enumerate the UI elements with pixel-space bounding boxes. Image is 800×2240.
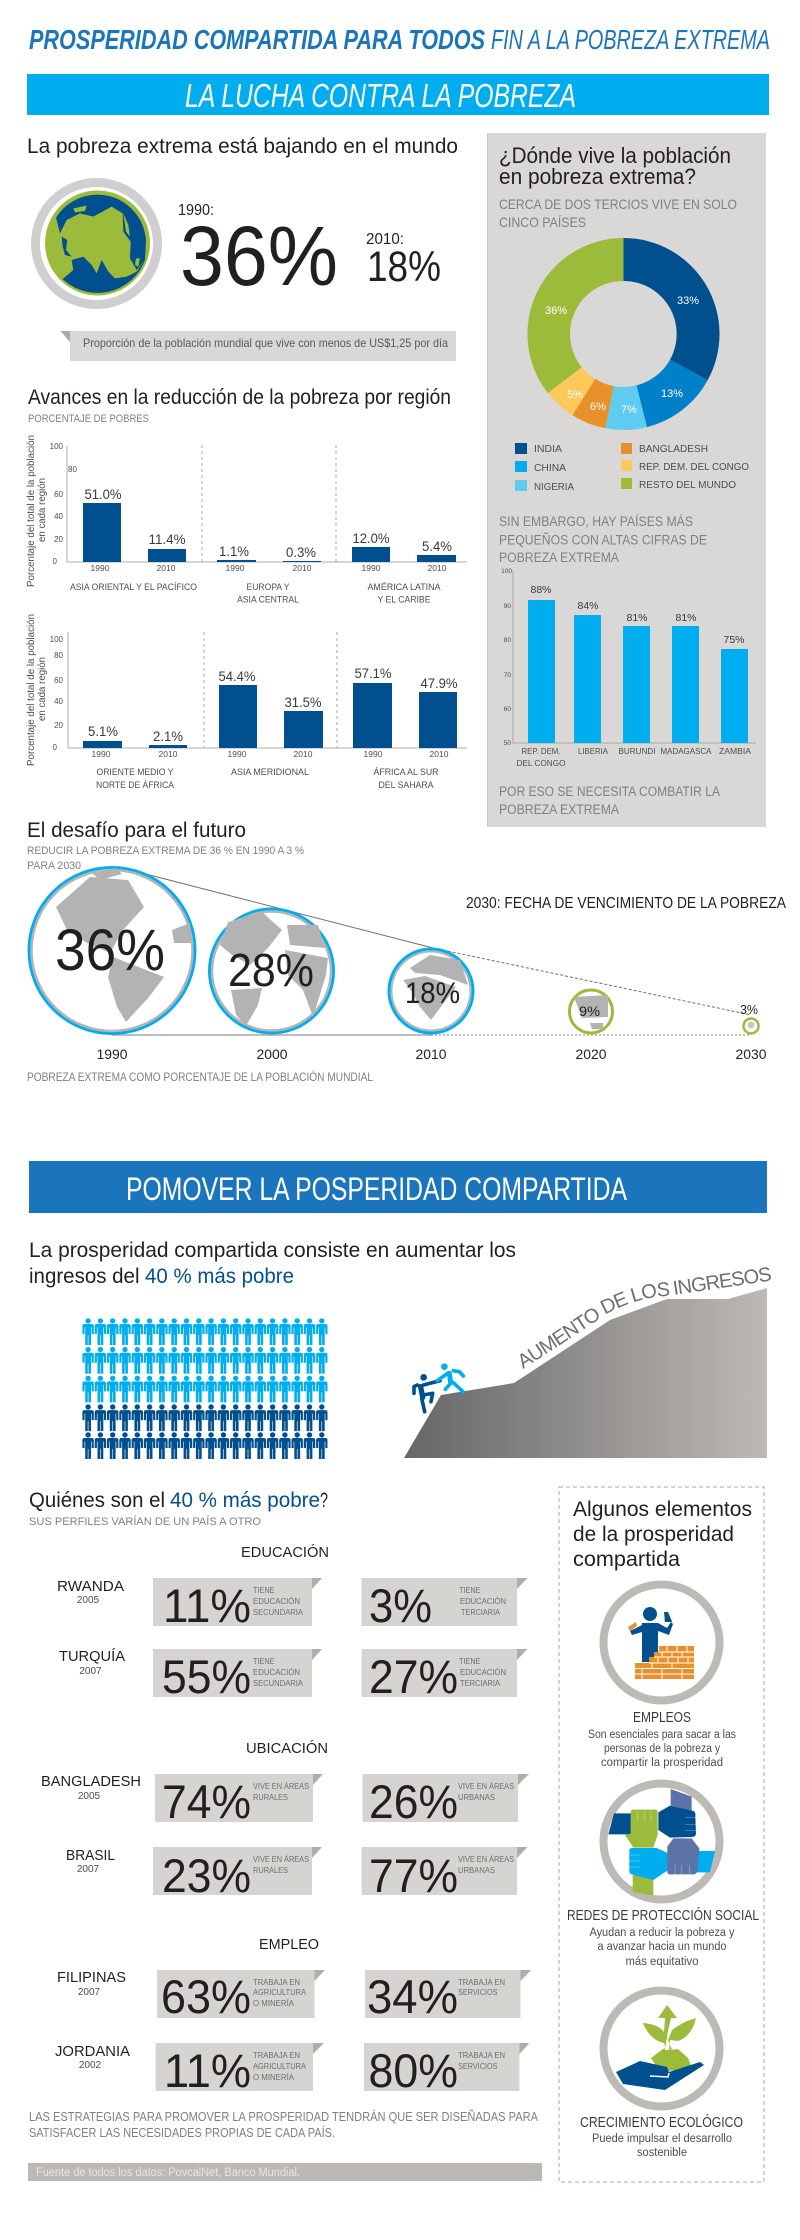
bar chart: regiones superior: 20 — [54, 535, 64, 544]
row: Rwanda: EDUCACIÓN — [253, 1597, 300, 1606]
panel: dónde vive la población — [487, 133, 766, 827]
row: Rwanda: RWANDA — [57, 1578, 124, 1595]
heading: prosperidad compartida: La prosperidad compartida consiste en aumentar los — [29, 1239, 516, 1262]
text block: estrategias — [29, 2109, 539, 2140]
heading: prosperidad compartida: 40 % más pobre — [145, 1265, 294, 1288]
subheading: países más pequeños: PEQUEÑOS CON ALTAS CIFRAS DE — [499, 532, 707, 548]
row: Filipinas: 63% — [161, 1970, 251, 2023]
globe 2010: 18% — [405, 977, 460, 1010]
year labels: 2030 — [736, 1046, 767, 1062]
row: Jordania: TRABAJA EN — [253, 2051, 300, 2060]
row: Rwanda: TIENE — [253, 1586, 274, 1595]
donut chart: 7% — [621, 404, 637, 416]
bar chart: regiones inferior: 20 — [54, 721, 64, 730]
heading: quiénes son — [29, 1489, 328, 1528]
heading: quiénes son: 40 % más pobre — [170, 1489, 320, 1512]
text block: estrategias: SATISFACER LAS NECESIDADES PROPIAS DE CADA PAÍS. — [29, 2125, 335, 2140]
row: Bangladesh: VIVE EN ÁREAS — [253, 1782, 309, 1791]
bar chart: regiones superior: 0.3% — [286, 544, 316, 560]
bar chart: regiones inferior: 1990 — [92, 749, 111, 759]
banner: la lucha contra la pobreza — [27, 74, 769, 115]
section: empleo: EMPLEO — [259, 1936, 319, 1953]
bar chart: regiones superior: Porcentaje del total de la población — [25, 435, 37, 587]
bar chart: regiones superior: 80 — [68, 465, 77, 474]
row: Turquía: TIENE — [253, 1657, 274, 1666]
row: Jordania: AGRICULTURA — [253, 2062, 307, 2071]
year labels: 2000 — [256, 1046, 288, 1062]
bar chart: países: 75% — [723, 634, 745, 646]
bar chart: regiones superior: 60 — [54, 490, 64, 499]
bar chart: regiones superior: 100 — [50, 442, 64, 451]
bar chart: países: ZAMBIA — [719, 746, 751, 756]
source bar: Fuente de todos los datos: PovcalNet, Banco Mundial. — [36, 2167, 300, 2179]
bar chart: regiones superior: 1990 — [226, 563, 245, 573]
bar chart: regiones inferior: 57.1% — [354, 665, 392, 681]
bar chart: regiones inferior: 2010 — [159, 749, 178, 759]
donut chart: 36% — [545, 305, 567, 317]
panel heading: CINCO PAÍSES — [499, 214, 586, 230]
heading: avances por región: PORCENTAJE DE POBRES — [28, 413, 149, 425]
row: Turquía: EDUCACIÓN — [460, 1668, 506, 1677]
bar chart: regiones superior: 12.0% — [352, 530, 390, 546]
bar chart: regiones superior: 40 — [54, 512, 64, 521]
bar chart: regiones inferior: 0 — [53, 743, 58, 752]
icon: climbers — [414, 1363, 463, 1412]
banner: promover la prosperidad — [29, 1161, 767, 1213]
bar chart: países: MADAGASCA — [660, 746, 712, 756]
row: Turquía: SECUNDARIA — [253, 1679, 304, 1688]
row: Jordania: SERVICIOS — [458, 2062, 498, 2071]
panel heading: ¿Dónde vive la población — [499, 143, 731, 168]
globe 2020 — [570, 990, 612, 1033]
text: empleos — [588, 1709, 736, 1769]
row: Brasil: 2007 — [77, 1864, 100, 1875]
bar chart: regiones inferior: 60 — [54, 676, 64, 685]
subheading: países más pequeños — [499, 514, 707, 565]
source bar — [28, 2163, 542, 2181]
heading: prosperidad compartida — [29, 1239, 516, 1288]
bar chart: regiones superior: 2010 — [293, 563, 312, 573]
heading: el desafío para el futuro — [27, 819, 304, 872]
text block: estrategias: LAS ESTRATEGIAS PARA PROMOVER LA PROSPERIDAD TENDRÁN QUE SER DISEÑADAS PARA — [29, 2109, 539, 2124]
bar chart: países: 84% — [577, 600, 599, 612]
bar chart: países: 70 — [504, 672, 511, 679]
globe 1990: 36% — [55, 918, 165, 983]
illustration: income mountain — [404, 1267, 771, 1458]
row: Jordania: 11% — [164, 2044, 251, 2097]
globe 2030 — [740, 1002, 758, 1034]
row: Bangladesh: 2005 — [78, 1791, 101, 1802]
bar chart: regiones superior: 0 — [53, 557, 58, 566]
bar chart: regiones inferior: Porcentaje del total de la población — [25, 614, 37, 766]
callout: proporción — [60, 331, 456, 361]
globe 2000: 28% — [228, 944, 314, 996]
heading: avances por región: Avances en la reducción de la pobreza por región — [28, 386, 451, 409]
row: Brasil: BRASIL — [66, 1847, 115, 1864]
text: crecimiento ecológico: sostenible — [637, 2147, 687, 2159]
row: Filipinas: FILIPINAS — [57, 1969, 126, 1986]
text: redes de protección social: REDES DE PROTECCIÓN SOCIAL — [567, 1907, 759, 1924]
legend: NIGERIA — [534, 481, 574, 493]
bar chart: países: BURUNDI — [618, 746, 656, 756]
globe 2000 — [210, 909, 334, 1033]
subheading: países más pequeños: SIN EMBARGO, HAY PAÍSES MÁS — [499, 514, 693, 529]
bar chart: regiones inferior: 54.4% — [218, 668, 256, 684]
panel heading: de la prosperidad — [573, 1522, 734, 1546]
row: Turquía: TURQUÍA — [59, 1648, 125, 1665]
stat: 2010: 18% — [367, 243, 441, 291]
text: empleos: EMPLEOS — [633, 1709, 691, 1726]
bar chart: regiones superior: 2010 — [157, 563, 176, 573]
globe 2010 — [389, 949, 473, 1033]
text: empleos: compartir la prosperidad — [601, 1757, 723, 1769]
row: Filipinas — [57, 1969, 531, 2023]
row: Turquía — [59, 1648, 528, 1703]
row: Brasil: VIVE EN ÁREAS — [253, 1855, 309, 1864]
bar chart: regiones inferior: 1990 — [364, 749, 383, 759]
row: Rwanda: 3% — [369, 1579, 432, 1632]
closing note: POR ESO SE NECESITA COMBATIR LA — [499, 784, 720, 799]
bar chart: regiones inferior: 47.9% — [420, 675, 458, 691]
stat: 1990: 1990: — [178, 202, 214, 219]
row: Brasil: RURALES — [253, 1866, 288, 1875]
row: Brasil: VIVE EN ÁREAS — [458, 1855, 514, 1864]
text: redes de protección social: Ayudan a reducir la pobreza y — [590, 1927, 735, 1939]
text: redes de protección social: más equitativo — [626, 1956, 698, 1968]
row: Rwanda: SECUNDARIA — [253, 1608, 304, 1617]
callout: proporción: Proporción de la población mundial que vive con menos de US$1,25 por día — [83, 336, 448, 350]
bar chart: regiones superior: 1.1% — [219, 543, 249, 559]
bar chart: países: 100 — [501, 568, 512, 575]
bar chart: países: DEL CONGO — [516, 758, 566, 768]
bar chart: regiones superior: Y EL CARIBE — [378, 594, 430, 606]
banner: promover la prosperidad: POMOVER LA POSPERIDAD COMPARTIDA — [126, 1171, 628, 1207]
globe 2030: 3% — [740, 1002, 758, 1017]
bar chart: regiones inferior: ASIA MERIDIONAL — [231, 767, 309, 778]
closing note: POBREZA EXTREMA — [499, 802, 619, 817]
donut chart: 33% — [677, 295, 699, 307]
globe 1990 — [29, 868, 195, 1034]
row: Bangladesh: 26% — [369, 1775, 458, 1828]
heading: quiénes son: ? — [320, 1489, 328, 1512]
row: Bangladesh: VIVE EN ÁREAS — [458, 1782, 514, 1791]
bar chart: regiones inferior: 2010 — [294, 749, 313, 759]
bar chart: regiones superior: 11.4% — [148, 531, 186, 547]
heading: quiénes son: Quiénes son el — [29, 1489, 165, 1512]
closing note — [499, 784, 720, 817]
row: Bangladesh: BANGLADESH — [41, 1773, 141, 1790]
section: educación: EDUCACIÓN — [241, 1544, 329, 1561]
row: Rwanda: 11% — [163, 1579, 251, 1632]
bar chart: regiones superior: 5.4% — [422, 538, 452, 554]
bar chart: países: 81% — [675, 612, 697, 624]
row: Brasil: 77% — [369, 1849, 458, 1902]
row: Filipinas: O MINERÍA — [253, 1999, 295, 2008]
row: Rwanda: TIENE — [459, 1586, 480, 1595]
text: empleos: Son esenciales para sacar a las — [588, 1729, 736, 1741]
panel heading: Algunos elementos — [573, 1497, 752, 1521]
caption: pobreza extrema como porcentaje: POBREZA EXTREMA COMO PORCENTAJE DE LA POBLACIÓN MUNDIAL — [27, 1071, 374, 1084]
row: Jordania: 2002 — [79, 2060, 102, 2071]
banner: la lucha contra la pobreza: LA LUCHA CONTRA LA POBREZA — [185, 77, 576, 114]
heading: prosperidad compartida: ingresos del — [29, 1265, 140, 1288]
bar chart: países: 88% — [530, 584, 552, 596]
bar chart: regiones inferior — [25, 614, 467, 791]
donut chart — [527, 238, 720, 430]
panel heading — [499, 143, 737, 230]
bar chart: regiones superior: AMÉRICA LATINA — [368, 582, 441, 593]
globe 2020: 9% — [579, 1003, 600, 1019]
bar chart: países: 81% — [626, 612, 648, 624]
row: Brasil — [66, 1847, 528, 1902]
row: Jordania: TRABAJA EN — [458, 2051, 505, 2060]
row: Rwanda: EDUCACIÓN — [460, 1597, 506, 1606]
heading: quiénes son: SUS PERFILES VARÍAN DE UN PAÍS A OTRO — [29, 1515, 261, 1528]
text: crecimiento ecológico — [580, 2114, 743, 2159]
bar chart: regiones inferior: en cada región — [36, 657, 48, 721]
bar chart: regiones superior — [25, 435, 467, 606]
year labels: 2010 — [416, 1046, 447, 1062]
legend: CHINA — [534, 462, 566, 474]
icon: hands — [604, 1784, 720, 1900]
bar chart: países: 80 — [504, 637, 511, 644]
text: redes de protección social: a avanzar hacia un mundo — [598, 1941, 726, 1953]
donut chart: 5% — [567, 389, 583, 401]
row: Turquía: TIENE — [459, 1657, 480, 1666]
bar chart: países: 60 — [504, 706, 511, 713]
section: empleo — [55, 1936, 531, 2097]
year labels: 2020 — [576, 1046, 607, 1062]
bar chart: regiones superior: EUROPA Y — [246, 582, 290, 593]
row: Turquía: 55% — [162, 1650, 251, 1703]
panel heading: CERCA DE DOS TERCIOS VIVE EN SOLO — [499, 196, 737, 212]
heading: el desafío para el futuro: REDUCIR LA POBREZA EXTREMA DE 36 % EN 1990 A 3 % — [27, 845, 304, 857]
row: Filipinas: 2007 — [78, 1987, 101, 1998]
bar chart: países: 90 — [504, 603, 511, 610]
bar chart: regiones superior: 2010 — [428, 563, 447, 573]
bar chart: regiones inferior: ORIENTE MEDIO Y — [96, 767, 174, 778]
bar chart: regiones inferior: 2010 — [430, 749, 449, 759]
row: Bangladesh: URBANAS — [458, 1793, 495, 1802]
row: Filipinas: TRABAJA EN — [253, 1978, 300, 1987]
donut chart: 6% — [590, 401, 606, 413]
bar chart: regiones inferior: ÁFRICA AL SUR — [374, 767, 439, 778]
bar chart: regiones inferior: 40 — [54, 697, 64, 706]
row: Rwanda — [57, 1578, 528, 1632]
row: Rwanda: 2005 — [77, 1595, 100, 1606]
section: educación — [57, 1544, 528, 1703]
legend: BANGLADESH — [639, 443, 708, 455]
text: crecimiento ecológico: Puede impulsar el desarrollo — [592, 2133, 732, 2145]
row: Jordania: O MINERÍA — [253, 2073, 295, 2082]
bar chart: regiones inferior: DEL SAHARA — [378, 780, 434, 791]
bar chart: regiones inferior: 5.1% — [88, 723, 118, 739]
section: ubicación: UBICACIÓN — [246, 1740, 328, 1757]
stat: 1990: 36% — [180, 209, 338, 303]
row: Bangladesh: RURALES — [253, 1793, 288, 1802]
bar chart: países: 50 — [504, 740, 511, 747]
bar chart: regiones inferior: 100 — [50, 635, 64, 644]
legend: INDIA — [534, 443, 562, 455]
stat: 2010: 2010: — [366, 231, 404, 248]
row: Jordania: 80% — [368, 2044, 458, 2097]
heading: avances por región — [28, 386, 451, 425]
row: Turquía: EDUCACIÓN — [253, 1668, 300, 1677]
row: Turquía: 27% — [369, 1650, 458, 1703]
icon: plant in hand — [604, 1990, 720, 2106]
row: Filipinas: SERVICIOS — [458, 1988, 498, 1997]
bar chart: países: REP. DEM. — [522, 746, 560, 756]
legend: REP. DEM. DEL CONGO — [639, 461, 749, 473]
bar chart: regiones inferior: 31.5% — [284, 694, 322, 710]
year labels: 1990 — [96, 1046, 128, 1062]
donut chart: 13% — [661, 388, 683, 400]
bar chart: regiones superior: 51.0% — [84, 486, 122, 502]
row: Jordania: JORDANIA — [55, 2043, 130, 2060]
row: Filipinas: AGRICULTURA — [253, 1988, 307, 1997]
row: Filipinas: 34% — [367, 1970, 458, 2023]
row: Bangladesh: 74% — [162, 1775, 251, 1828]
text: crecimiento ecológico: CRECIMIENTO ECOLÓGICO — [580, 2114, 743, 2131]
bar chart: regiones superior: ASIA CENTRAL — [237, 594, 299, 606]
legend — [515, 443, 749, 493]
panel heading: en pobreza extrema? — [499, 164, 696, 189]
text: redes de protección social — [567, 1907, 759, 1968]
bar chart: regiones inferior: 1990 — [228, 749, 247, 759]
row: Turquía: 2007 — [79, 1666, 102, 1677]
legend: RESTO DEL MUNDO — [639, 479, 736, 491]
row: Rwanda: TERCIARIA — [461, 1608, 501, 1617]
bar chart: países — [501, 568, 756, 768]
heading: la pobreza extrema: La pobreza extrema está bajando en el mundo — [27, 135, 458, 158]
row: Bangladesh — [41, 1773, 529, 1828]
row: Turquía: TERCIARIA — [460, 1679, 501, 1688]
icon: globe — [36, 182, 158, 304]
row: Jordania — [55, 2043, 530, 2097]
row: Brasil: URBANAS — [458, 1866, 495, 1875]
row: Filipinas: TRABAJA EN — [458, 1978, 505, 1987]
bar chart: regiones superior: ASIA ORIENTAL Y EL PACÍFICO — [70, 582, 197, 593]
illustration: income mountain: AUMENTO DE LOS INGRESOS — [520, 1267, 771, 1369]
year labels — [96, 1046, 767, 1062]
heading: el desafío para el futuro: PARA 2030 — [27, 860, 81, 872]
subheading: países más pequeños: POBREZA EXTREMA — [499, 550, 619, 565]
bar chart: regiones superior: 1990 — [362, 563, 381, 573]
title: PROSPERIDAD COMPARTIDA PARA TODOS — [29, 24, 485, 55]
bar chart: regiones inferior: NORTE DE ÁFRICA — [96, 780, 175, 791]
icon grid: people — [82, 1318, 328, 1459]
bar chart: países: LIBERIA — [578, 746, 608, 756]
row: Brasil: 23% — [162, 1849, 251, 1902]
bar chart: regiones superior: en cada región — [36, 478, 48, 542]
section: ubicación — [41, 1740, 529, 1902]
icon: worker — [604, 1584, 720, 1700]
heading: el desafío para el futuro: El desafío para el futuro — [27, 819, 246, 842]
chart: globes timeline — [29, 868, 767, 1062]
panel heading: compartida — [573, 1547, 680, 1571]
text: empleos: personas de la pobreza y — [604, 1743, 720, 1755]
panel heading — [573, 1497, 752, 1571]
bar chart: regiones inferior: 2.1% — [153, 728, 183, 744]
bar chart: regiones superior: 1990 — [91, 563, 110, 573]
bar chart: regiones inferior: 80 — [54, 651, 64, 660]
panel: algunos elementos — [559, 1487, 764, 2182]
stat: 2010 — [366, 231, 441, 291]
